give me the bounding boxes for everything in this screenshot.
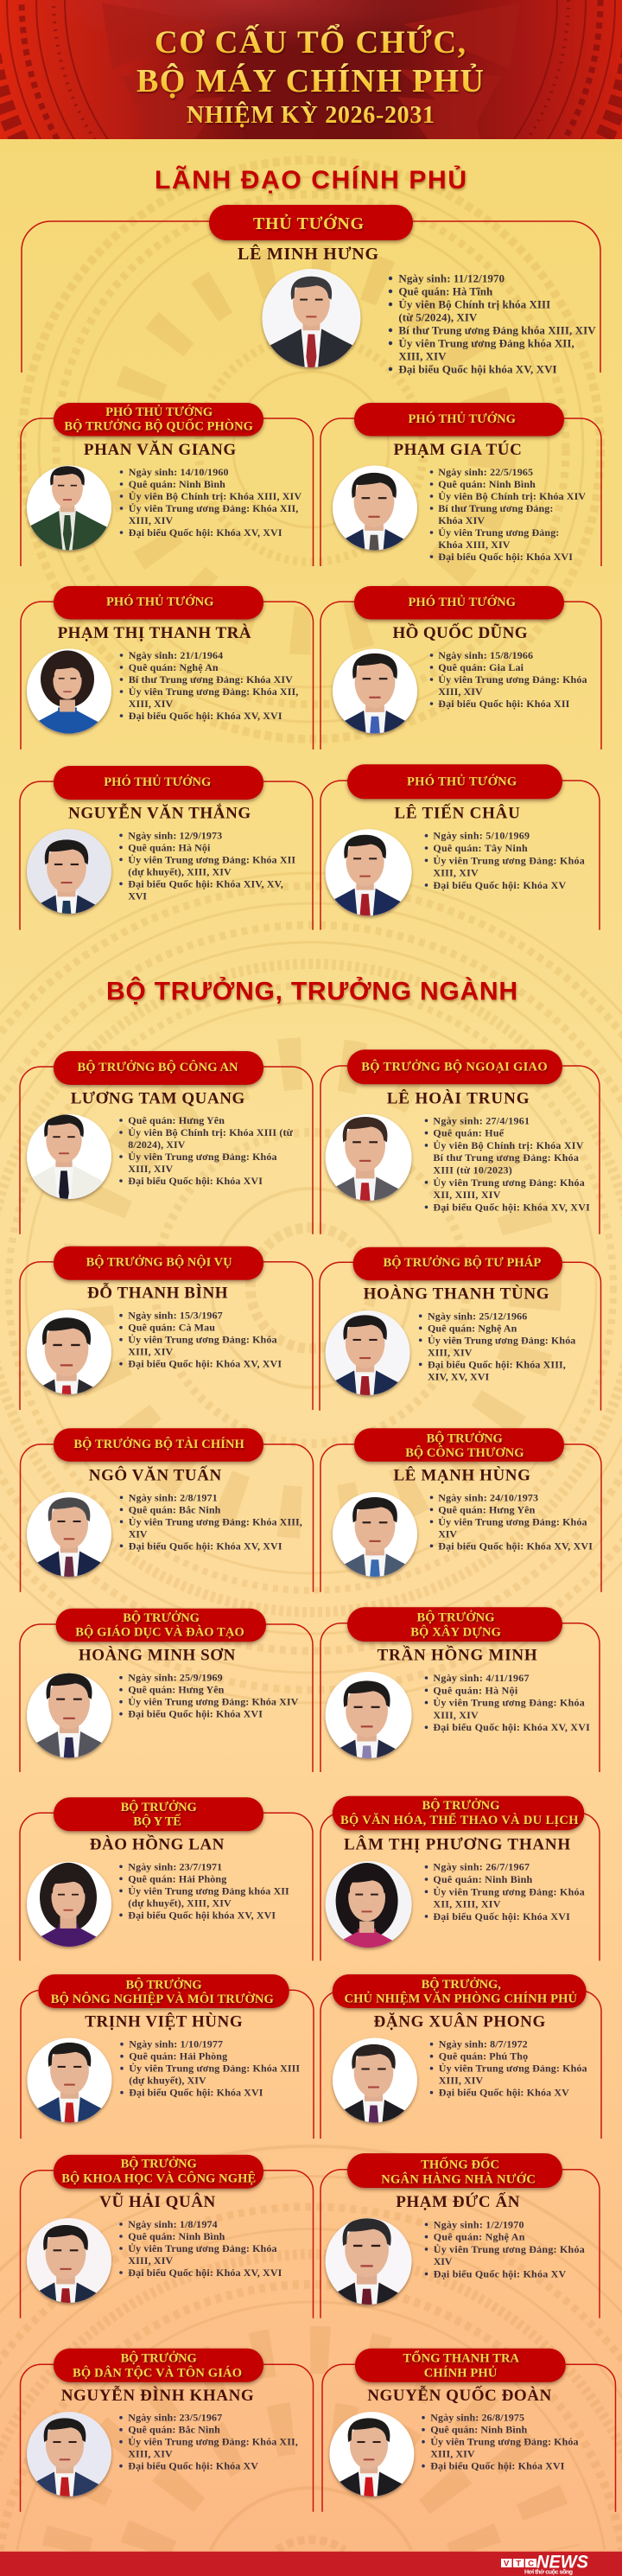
portrait (323, 1861, 414, 1951)
details: Ngày sinh: 11/12/1970 (398, 271, 505, 284)
panel: Phạm Gia Túc (320, 402, 602, 566)
portrait (2, 2218, 130, 2346)
details: XIII, XIV (129, 698, 174, 710)
details: Ủy viên Trung ương Đảng: Khóa (438, 673, 587, 685)
role pill: BỘ TRƯỞNG BỘ QUỐC PHÒNG (64, 418, 253, 434)
role pill: BỘ TRƯỞNG BỘ NỘI VỤ (86, 1254, 232, 1269)
details: XIV (129, 1527, 148, 1540)
details: Đại biểu Quốc hội khóa XV, XVI (398, 362, 557, 375)
panel: Lê Hoài Trung (301, 1049, 600, 1240)
logo: VTC News: Hơi thở cuộc sống (524, 2569, 573, 2576)
panel: Lê Tiến Châu (320, 763, 600, 930)
details: Quê quán: Phú Thọ (439, 2050, 528, 2063)
details: Quê quán: Nghệ An (428, 1322, 517, 1334)
details: XIII, XIV (128, 1163, 174, 1175)
details: Khóa XIV (438, 514, 485, 526)
details (425, 1114, 590, 1213)
details: Đại biểu Quốc hội: Khóa XV, XVI (438, 1540, 593, 1552)
role pill (355, 2349, 566, 2382)
panel: Lê Mạnh Hùng (320, 1427, 602, 1592)
details: Ngày sinh: 1/8/1974 (128, 2218, 218, 2230)
title: BỘ MÁY CHÍNH PHỦ (136, 62, 484, 99)
details: XIII, XIV (433, 867, 479, 879)
details: Ngày sinh: 1/10/1977 (129, 2038, 223, 2050)
role pill (347, 1607, 562, 1642)
details: Quê quán: Nghệ An (434, 2231, 525, 2243)
details: Quê quán: Hà Nội (433, 1684, 518, 1696)
details: Quê quán: Cà Mau (128, 1322, 215, 1334)
details: Đại biểu Quốc hội khóa XV, XVI (128, 1909, 276, 1921)
details: Ngày sinh: 12/9/1973 (128, 829, 222, 841)
details (120, 2038, 300, 2099)
details: Ủy viên Bộ Chính trị: Khóa XIV (438, 490, 586, 502)
details: Ủy viên Trung ương Đảng: (438, 526, 559, 539)
role pill (347, 764, 562, 799)
details: (dự khuyết), XIV (129, 2075, 206, 2087)
name: LÊ MINH HƯNG (238, 243, 378, 264)
details: XIII (từ 10/2023) (433, 1164, 512, 1176)
role pill (54, 403, 263, 436)
details: Bí thư Trung ương Đảng: Khóa XIV (129, 673, 293, 685)
background drum motif, bottom (0, 2146, 622, 2550)
portrait (308, 2412, 429, 2532)
details (119, 829, 295, 902)
details: Ngày sinh: 24/10/1973 (438, 1491, 538, 1503)
details: Quê quán: Nghệ An (129, 661, 219, 673)
role pill: BỘ TRƯỞNG BỘ NGOẠI GIAO (361, 1059, 548, 1074)
role pill: THỐNG ĐỐC (421, 2157, 499, 2172)
details: Ngày sinh: 8/7/1972 (439, 2038, 528, 2050)
details: Ngày sinh: 27/4/1961 (433, 1114, 530, 1126)
role pill: BỘ NÔNG NGHIỆP VÀ MÔI TRƯỜNG (51, 1992, 274, 2006)
name: HOÀNG MINH SƠN (79, 1646, 236, 1665)
details: Ủy viên Trung ương Đảng: Khóa (433, 1885, 585, 1897)
details: Ủy viên Trung ương Đảng: Khóa (433, 854, 585, 866)
details: XIV (434, 2255, 453, 2267)
name: HỒ QUỐC DŨNG (392, 623, 528, 642)
details: Ngày sinh: 14/10/1960 (129, 466, 228, 478)
name: ĐỖ THANH BÌNH (87, 1284, 228, 1303)
role pill (354, 1428, 564, 1462)
details: Ủy viên Trung ương Đảng: Khóa (433, 1176, 585, 1189)
role pill (54, 1797, 263, 1831)
details: Ngày sinh: 2/8/1971 (129, 1491, 218, 1503)
details (389, 271, 596, 375)
drum rings in header (0, 0, 622, 139)
role pill: PHÓ THỦ TƯỚNG (105, 405, 213, 419)
details: Đại biểu Quốc hội: Khóa XIII, (428, 1358, 566, 1370)
details: Ủy viên Bộ Chính trị: Khóa XIII (từ (128, 1126, 294, 1138)
details: Quê quán: Hải Phòng (128, 1872, 226, 1884)
details: Đại biểu Quốc hội: Khóa XV (433, 879, 567, 891)
panel: Nguyễn Quốc Đoàn (308, 2349, 615, 2532)
portrait (260, 268, 363, 371)
heading: Bộ trưởng, Trưởng ngành: BỘ TRƯỞNG, TRƯỞNG NGÀNH (106, 977, 517, 1006)
details: Đại biểu Quốc hội: Khóa XIV, XV, (128, 877, 283, 889)
details: XIV (438, 1527, 457, 1540)
details: Bí thư Trung ương Đảng khóa XIII, XIV (398, 323, 596, 336)
details (119, 1860, 289, 1921)
details: Quê quán: Hưng Yên (128, 1684, 225, 1696)
panel: Đỗ Thanh Bình (19, 1245, 314, 1410)
details: XIII, XIV (128, 2254, 174, 2267)
details: Quê quán: Hưng Yên (438, 1503, 536, 1515)
portrait (323, 1310, 412, 1399)
details: Ủy viên Bộ Chính trị: Khóa XIV (433, 1139, 584, 1151)
portrait (297, 2218, 436, 2352)
details: Đại biểu Quốc hội: Khóa XVI (129, 2087, 263, 2099)
role pill (56, 1609, 266, 1642)
portrait (24, 1113, 114, 1203)
details: Ủy viên Trung ương Đảng: Khóa (128, 1151, 276, 1163)
details: Bí thư Trung ương Đảng: Khóa (433, 1151, 579, 1164)
background drum motif, middle (0, 873, 622, 1703)
role pill: BỘ TRƯỞNG (121, 1800, 197, 1814)
portrait (24, 1310, 114, 1399)
details: XIII, XIV (129, 514, 174, 526)
details: Đại biểu Quốc hội: Khóa XV (434, 2268, 567, 2280)
role pill: PHÓ THỦ TƯỚNG (407, 774, 517, 788)
details: Đại biểu Quốc hội: Khóa XVI (128, 1708, 263, 1720)
role pill: CHỦ NHIỆM VĂN PHÒNG CHÍNH PHỦ (344, 1991, 578, 2005)
details: Quê quán: Ninh Bình (430, 2424, 528, 2436)
details: XIII, XIV (128, 2448, 173, 2460)
panel: Nguyễn Đình Khang (4, 2349, 313, 2532)
details: Ủy viên Trung ương Đảng: Khóa (128, 1334, 276, 1346)
portrait (24, 465, 114, 554)
details: Ngày sinh: 23/5/1967 (128, 2412, 222, 2424)
role pill: BỘ TRƯỞNG BỘ TƯ PHÁP (384, 1255, 541, 1270)
portrait (24, 828, 114, 918)
details: Ủy viên Trung ương Đảng: Khóa (439, 2063, 587, 2075)
name: ĐÀO HỒNG LAN (90, 1834, 225, 1853)
name: LƯƠNG TAM QUANG (71, 1089, 245, 1107)
panel: Phạm Đức Ấn (297, 2153, 600, 2352)
portrait (323, 1672, 414, 1762)
name: NGÔ VĂN TUẤN (89, 1465, 221, 1484)
details: Ủy viên Trung ương Đảng: Khóa XIV (128, 1696, 299, 1708)
details: Quê quán: Bắc Ninh (129, 1503, 221, 1515)
name: VŨ HẢI QUÂN (99, 2192, 215, 2211)
drum triangles in header (102, 3, 520, 139)
details: Quê quán: Hà Nội (128, 841, 211, 853)
details: Ngày sinh: 22/5/1965 (438, 466, 533, 478)
portrait (323, 1113, 414, 1205)
role pill (347, 1049, 562, 1084)
details: Ngày sinh: 4/11/1967 (433, 1672, 529, 1684)
logo: VTC News: V (504, 2559, 510, 2569)
role pill: NGÂN HÀNG NHÀ NƯỚC (381, 2171, 536, 2186)
panel: Trịnh Việt Hùng (20, 1973, 314, 2139)
name: NGUYỄN ĐÌNH KHANG (61, 2386, 254, 2405)
name: NGUYỄN QUỐC ĐOÀN (367, 2386, 551, 2405)
role pill: BỘ TRƯỞNG (123, 1610, 200, 1625)
role pill: BỘ TRƯỞNG, (422, 1977, 501, 1992)
details: Bí thư Trung ương Đảng: (438, 502, 553, 514)
details: Ngày sinh: 21/1/1964 (129, 649, 223, 661)
details: Quê quán: Tây Ninh (433, 842, 528, 854)
name: PHẠM ĐỨC ẤN (396, 2192, 520, 2211)
details: Đại biểu Quốc hội: Khóa XV, XVI (433, 1201, 590, 1213)
details: Ủy viên Trung ương Đảng khóa XII, (398, 336, 574, 349)
details (119, 1114, 294, 1187)
details: Ngày sinh: 26/7/1967 (433, 1861, 530, 1873)
portrait (330, 1492, 420, 1580)
details: Ngày sinh: 26/8/1975 (430, 2412, 524, 2424)
details (425, 830, 585, 891)
role pill: BỘ DÂN TỘC VÀ TÔN GIÁO (73, 2365, 242, 2380)
details: Ủy viên Trung ương Đảng: Khóa XII, (129, 685, 298, 698)
details: Đại biểu Quốc hội: Khóa XV, XVI (129, 526, 282, 539)
portrait (331, 2038, 419, 2126)
details: 8/2024), XIV (128, 1138, 186, 1151)
title: CƠ CẤU TỔ CHỨC, (155, 23, 466, 61)
role pill: BỘ TRƯỞNG (121, 2157, 197, 2171)
details: Quê quán: Hưng Yên (128, 1114, 225, 1126)
portrait (323, 829, 414, 920)
details: Quê quán: Ninh Bình (129, 478, 225, 490)
details: Đại biểu Quốc hội: Khóa XV (439, 2087, 569, 2099)
portrait (25, 1862, 113, 1950)
details: Đại biểu Quốc hội: Khóa XVI (433, 1910, 570, 1922)
details: Ngày sinh: 25/9/1969 (128, 1672, 223, 1684)
role pill: BỘ TRƯỞNG (416, 1610, 494, 1624)
details: Đại biểu Quốc hội: Khóa XVI (438, 551, 573, 563)
details: Quê quán: Gia Lai (438, 661, 524, 673)
details: Ủy viên Trung ương Đảng khóa XII (128, 1884, 289, 1897)
role pill (354, 403, 564, 436)
panel: Phạm Thị Thanh Trà (14, 586, 313, 764)
details: Đại biểu Quốc hội: Khóa XV (128, 2460, 258, 2472)
details: Quê quán: Hà Tĩnh (398, 284, 493, 297)
details: Ngày sinh: 15/8/1966 (438, 649, 533, 661)
panel: Đặng Xuân Phong (320, 1973, 602, 2139)
role pill (54, 1247, 263, 1280)
role pill (347, 2153, 562, 2188)
panel: Hoàng Thanh Tùng (319, 1247, 601, 1411)
details: Quê quán: Ninh Bình (433, 1873, 533, 1885)
details: XII, XIII, XIV (433, 1189, 501, 1201)
details (120, 466, 301, 539)
details (120, 1491, 302, 1552)
role pill: BỘ VĂN HÓA, THỂ THAO VÀ DU LỊCH (340, 1812, 579, 1827)
details: Quê quán: Bắc Ninh (128, 2424, 220, 2436)
details: Ngày sinh: 15/3/1967 (128, 1310, 223, 1322)
details: Quê quán: Hải Phòng (129, 2050, 227, 2063)
portrait (4, 2412, 125, 2532)
details: Quê quán: Huế (433, 1127, 505, 1139)
role pill (354, 586, 564, 619)
details: Đại biểu Quốc hội: Khóa XII (438, 698, 570, 710)
role pill (54, 766, 263, 800)
panel: Thủ tướng (22, 205, 600, 387)
details: XIII, XIV (428, 1346, 473, 1358)
details: (dự khuyết), XIII, XIV (128, 1897, 232, 1909)
role pill: BỘ CÔNG THƯƠNG (405, 1445, 524, 1460)
details (430, 466, 586, 563)
panel: Nguyễn Văn Thắng (19, 765, 314, 930)
role pill (333, 1974, 587, 2008)
details (119, 1310, 282, 1370)
panel: Phan Văn Giang (18, 403, 314, 566)
logo: VTC News: NEWS (536, 2552, 588, 2573)
role pill: BỘ TRƯỞNG (422, 1798, 499, 1813)
details: Ủy viên Trung ương Đảng: Khóa XII (128, 853, 295, 865)
role pill (54, 2155, 263, 2189)
details (120, 649, 298, 722)
name: HOÀNG THANH TÙNG (364, 1284, 549, 1303)
title: NHIỆM KỲ 2026-2031 (187, 102, 435, 129)
details: Ủy viên Trung ương Đảng: Khóa XIII (129, 2063, 300, 2075)
panel: Hồ Quốc Dũng (320, 585, 602, 749)
name: TRẦN HỒNG MINH (378, 1646, 537, 1665)
role pill: BỘ KHOA HỌC VÀ CÔNG NGHỆ (61, 2171, 256, 2185)
role pill (209, 205, 413, 240)
role pill: PHÓ THỦ TƯỚNG (408, 595, 516, 609)
details: Đại biểu Quốc hội: Khóa XVI (128, 1175, 263, 1187)
panel: Ngô Văn Tuấn (19, 1427, 314, 1592)
role pill (38, 1974, 289, 2008)
details (119, 2218, 282, 2279)
heading: Lãnh đạo Chính phủ: LÃNH ĐẠO CHÍNH PHỦ (155, 165, 466, 194)
background drum motif, top (22, 160, 600, 739)
details: XIII, XIV (128, 1346, 174, 1358)
panel: Lâm Thị Phương Thanh (320, 1795, 600, 1961)
role pill: THỦ TƯỚNG (253, 213, 364, 233)
details: Ủy viên Bộ Chính trị khóa XIII (398, 297, 550, 310)
role pill: BỘ TRƯỞNG (121, 2351, 197, 2366)
role pill: PHÓ THỦ TƯỚNG (408, 411, 516, 426)
role pill (54, 1051, 263, 1085)
panel: Lương Tam Quang (7, 1051, 313, 1234)
name: PHAN VĂN GIANG (84, 440, 236, 459)
logo: VTC News: T (516, 2559, 521, 2569)
role pill: BỘ XÂY DỰNG (410, 1624, 501, 1639)
role pill (353, 1247, 562, 1280)
name: NGUYỄN VĂN THẮNG (68, 803, 251, 822)
details: (từ 5/2024), XIV (398, 310, 478, 323)
name: PHẠM THỊ THANH TRÀ (58, 623, 251, 642)
portrait (26, 2038, 114, 2126)
details: XIII, XIV (438, 685, 483, 698)
details: XIII, XIV (398, 349, 447, 362)
details (430, 649, 587, 710)
panel: Vũ Hải Quân (2, 2155, 313, 2346)
details: Ủy viên Trung ương Đảng: Khóa (428, 1334, 575, 1346)
details: Đại biểu Quốc hội: Khóa XVI (430, 2460, 565, 2472)
details: Ủy viên Trung ương Đảng: Khóa (438, 1515, 587, 1527)
portrait (25, 1673, 113, 1762)
details (425, 1672, 590, 1733)
details: XIII, XIV (439, 2075, 484, 2087)
details: Đại biểu Quốc hội: Khóa XV, XVI (433, 1721, 590, 1733)
details: Ngày sinh: 1/2/1970 (434, 2218, 524, 2230)
details: Ủy viên Trung ương Đảng: Khóa (434, 2243, 585, 2255)
details: XIII, XIV (433, 1709, 479, 1721)
details: XIV, XV, XVI (428, 1370, 490, 1382)
role pill (54, 2349, 263, 2382)
details: Quê quán: Ninh Bình (438, 478, 536, 490)
details: Đại biểu Quốc hội: Khóa XV, XVI (128, 2267, 282, 2279)
details: XII, XIII, XIV (433, 1898, 501, 1910)
role pill: BỘ TRƯỞNG BỘ CÔNG AN (78, 1060, 238, 1074)
details (425, 2218, 585, 2280)
role pill: BỘ TRƯỞNG (427, 1431, 503, 1446)
title (136, 23, 484, 129)
details: Ủy viên Trung ương Đảng: Khóa XII, (128, 2436, 298, 2448)
logo: VTC News: C (528, 2559, 534, 2569)
name: TRỊNH VIỆT HÙNG (85, 2012, 243, 2031)
role pill: CHÍNH PHỦ (424, 2365, 498, 2380)
details: (dự khuyết), XIII, XIV (128, 865, 232, 877)
details (419, 1310, 575, 1382)
name: LÊ TIẾN CHÂU (394, 803, 520, 822)
details: Ủy viên Trung ương Đảng: Khóa (433, 1697, 585, 1709)
details (425, 1861, 585, 1922)
details: Ngày sinh: 5/10/1969 (433, 830, 530, 842)
role pill: BỘ TRƯỞNG (126, 1978, 202, 1993)
details: Ủy viên Trung ương Đảng: Khóa XII, (129, 502, 298, 514)
portrait (24, 1492, 114, 1580)
details: XIII, XIV (430, 2448, 475, 2460)
panel: Trần Hồng Minh (320, 1606, 600, 1772)
details: Khóa XIII, XIV (438, 539, 511, 551)
details (430, 1491, 593, 1552)
details: Đại biểu Quốc hội: Khóa XV, XVI (129, 710, 282, 722)
name: LÊ MẠNH HÙNG (394, 1465, 530, 1484)
role pill: PHÓ THỦ TƯỚNG (106, 595, 213, 609)
details: Ngày sinh: 23/7/1971 (128, 1860, 222, 1872)
name: LÂM THỊ PHƯƠNG THANH (344, 1834, 570, 1853)
header banner (0, 0, 622, 139)
details: Đại biểu Quốc hội: Khóa XV, XVI (129, 1540, 282, 1552)
details: Ủy viên Trung ương Đảng: Khóa (128, 2242, 276, 2254)
details (422, 2412, 579, 2472)
role pill: BỘ Y TẾ (133, 1814, 181, 1829)
role pill (333, 1796, 584, 1830)
portrait (24, 648, 114, 737)
details (430, 2038, 587, 2099)
role pill: PHÓ THỦ TƯỚNG (104, 775, 211, 789)
role pill: BỘ GIÁO DỤC VÀ ĐÀO TẠO (75, 1625, 244, 1640)
portrait (330, 465, 420, 554)
details: Đại biểu Quốc hội: Khóa XV, XVI (128, 1358, 282, 1370)
role pill (54, 1428, 263, 1462)
role pill: TỔNG THANH TRA (403, 2350, 520, 2366)
footer bar (0, 2552, 622, 2576)
logo: VTC News (501, 2552, 588, 2576)
panel: Hoàng Minh Sơn (19, 1608, 314, 1772)
role pill: BỘ TRƯỞNG BỘ TÀI CHÍNH (73, 1437, 245, 1451)
details (119, 2412, 298, 2472)
name: ĐẶNG XUÂN PHONG (373, 2012, 546, 2031)
details (119, 1672, 299, 1720)
portrait (330, 648, 420, 737)
name: PHẠM GIA TÚC (394, 440, 522, 459)
panel: Đào Hồng Lan (19, 1796, 314, 1961)
details: XVI (128, 889, 147, 902)
details: Ngày sinh: 25/12/1966 (428, 1310, 527, 1322)
details: Quê quán: Ninh Bình (128, 2230, 225, 2242)
role pill (54, 586, 263, 619)
details: Ủy viên Trung ương Đảng: Khóa (430, 2436, 579, 2448)
details: Ủy viên Bộ Chính trị: Khóa XIII, XIV (129, 490, 301, 502)
name: LÊ HOÀI TRUNG (387, 1088, 530, 1107)
details: Ủy viên Trung ương Đảng: Khóa XIII, (129, 1515, 302, 1527)
